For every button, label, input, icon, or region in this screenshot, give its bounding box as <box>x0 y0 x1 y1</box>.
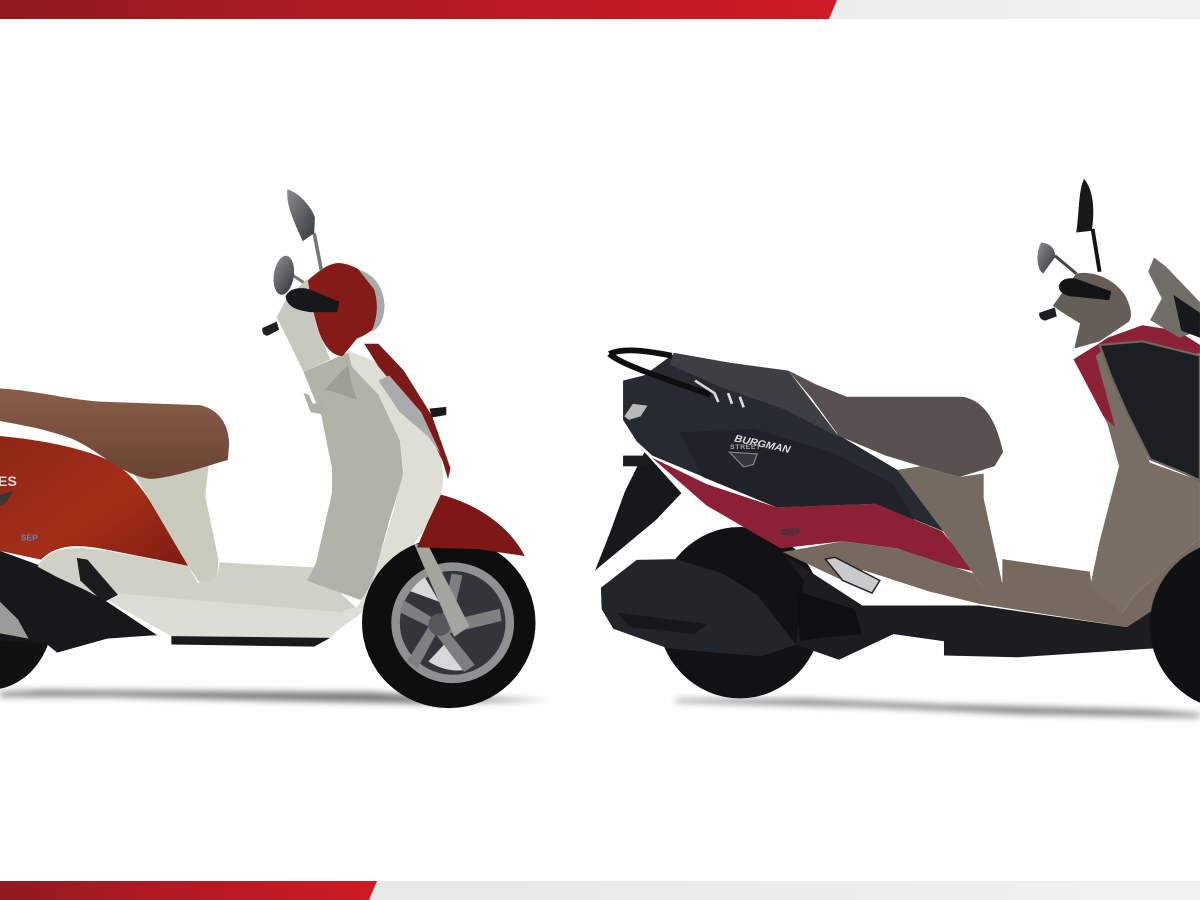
stand bracket <box>623 456 648 466</box>
red side body <box>0 436 188 566</box>
grey seat <box>788 371 1003 477</box>
grip <box>286 288 339 312</box>
dark rear body <box>623 354 946 532</box>
floorboard and lower body <box>37 548 357 639</box>
under-seat grey panel <box>897 466 1002 588</box>
rail chrome details <box>695 381 744 407</box>
badge: SEP: SEP <box>21 533 38 543</box>
hook <box>303 393 323 414</box>
grip <box>1059 278 1111 300</box>
tall mirror <box>1076 179 1100 272</box>
side panel dark highlight <box>679 429 921 531</box>
black front panel <box>1100 341 1200 481</box>
lever <box>1039 307 1057 321</box>
rear wheel <box>0 633 48 689</box>
SEP badge: SEP <box>781 527 799 537</box>
muffler <box>601 559 796 656</box>
key panel <box>325 365 357 400</box>
handlebar cover <box>1053 273 1131 348</box>
indicator stub <box>429 407 446 417</box>
underbody strip <box>171 636 330 647</box>
rear wheel <box>657 527 822 698</box>
rear mudguard <box>595 452 681 571</box>
ground shadow <box>676 699 1200 717</box>
engine <box>0 551 157 653</box>
BURGMAN logo: BURGMAN <box>733 434 792 456</box>
lever <box>262 322 279 336</box>
black underbody <box>783 554 1200 660</box>
headlight rim <box>359 270 384 332</box>
small mirror <box>1037 242 1076 274</box>
leg shield outer <box>343 351 443 626</box>
engine details <box>796 591 862 641</box>
red headlight cowl <box>308 263 382 356</box>
badge: model logo <box>0 474 17 505</box>
front fender <box>417 495 525 556</box>
top banner <box>0 0 1200 19</box>
footpeg <box>77 558 118 602</box>
left scooter: red and cream with brown seat <box>0 189 550 708</box>
windscreen <box>1148 257 1200 338</box>
headlamp strip <box>378 375 441 454</box>
lower mirror <box>271 254 303 296</box>
grey floor and lower trim <box>783 538 1200 627</box>
maroon side strip <box>651 457 975 572</box>
STREET logo: STREET <box>730 444 761 451</box>
upper mirror <box>287 189 321 270</box>
front red panel <box>364 344 451 479</box>
maroon front trim <box>1074 325 1200 427</box>
ground shadow <box>0 690 550 704</box>
chrome passenger peg <box>825 557 880 593</box>
leg shield inner <box>303 353 403 600</box>
handlebar neck <box>277 279 330 372</box>
leg shield <box>1074 345 1200 613</box>
upper seat-side panel <box>670 353 840 438</box>
dark cowl <box>1174 295 1200 338</box>
right scooter: black and maroon with grey seat <box>595 179 1200 717</box>
grab rail <box>609 350 711 395</box>
front wheel <box>1150 540 1200 710</box>
under-seat cream panel <box>134 463 218 583</box>
front wheel <box>362 537 536 708</box>
front fork <box>414 544 469 637</box>
brown seat <box>0 388 229 479</box>
tail lamp <box>624 404 648 420</box>
shield badge <box>729 452 757 467</box>
bottom banner <box>0 881 1200 900</box>
